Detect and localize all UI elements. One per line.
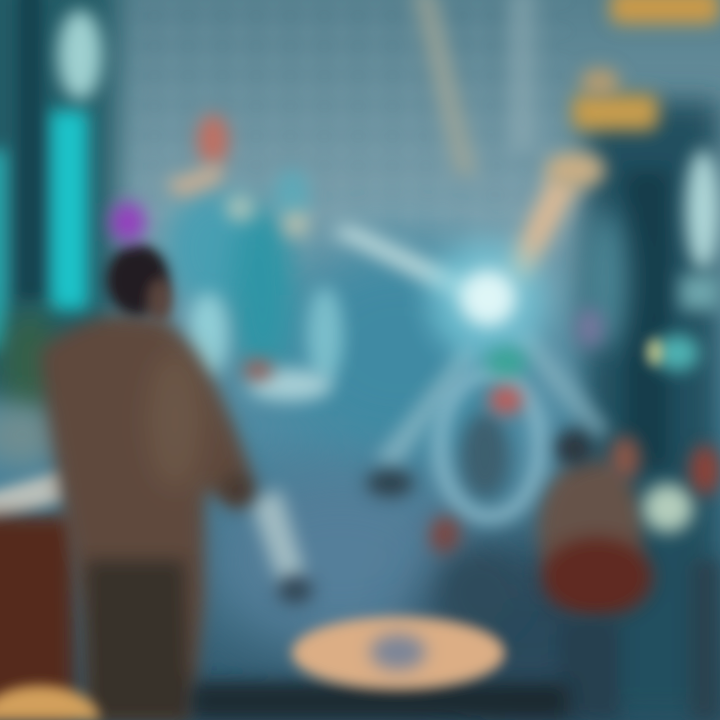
- man in brown suit: [40, 202, 256, 720]
- seated figure with guitar: [429, 429, 653, 720]
- right wall: [576, 100, 720, 720]
- bottom left amber light: [0, 686, 100, 720]
- ring device with red and green core: [366, 347, 540, 517]
- glowing round table: [190, 617, 570, 720]
- left wall with cyan columns: [0, 0, 115, 720]
- right lower details: [643, 445, 720, 720]
- central holographic figure: [165, 114, 343, 604]
- top ceiling streak: [412, 0, 536, 175]
- top right amber lights: [572, 0, 720, 130]
- light beams and burst: [330, 152, 610, 470]
- background glow and ceiling grid: [130, 0, 640, 720]
